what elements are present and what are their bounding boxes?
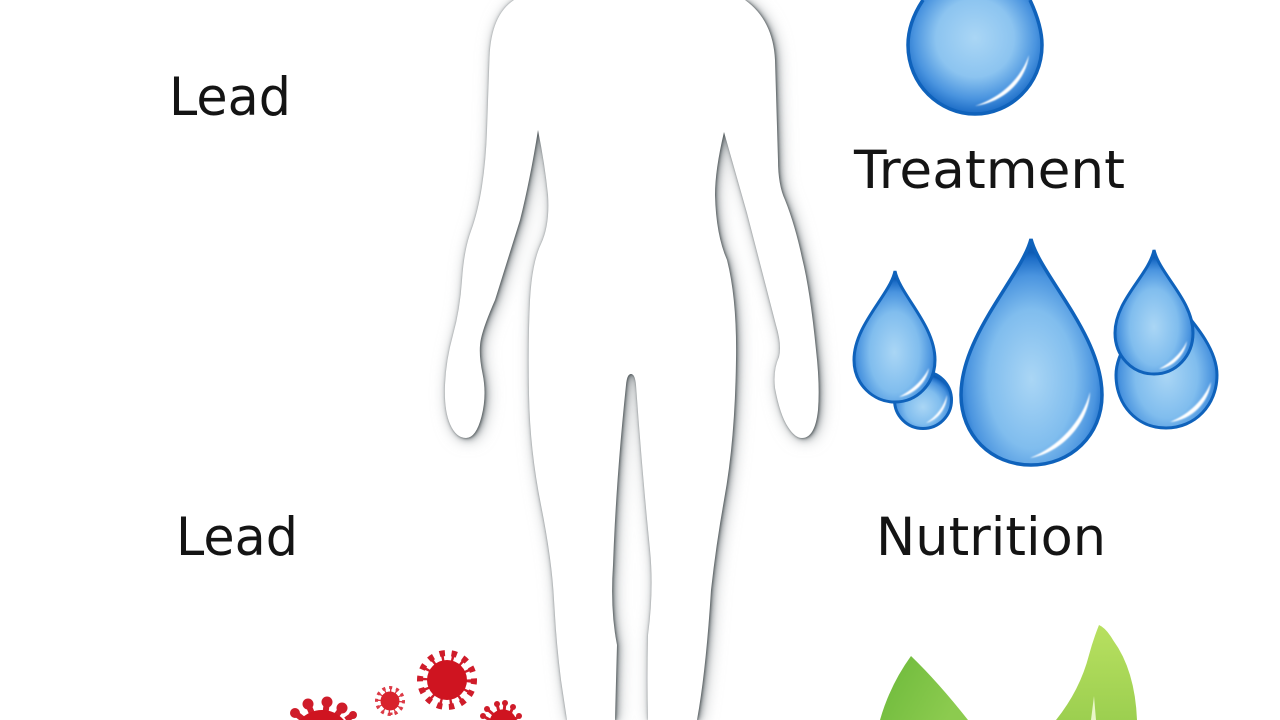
body silhouette: [445, 0, 819, 720]
label: Lead (top): Lead: [169, 67, 291, 128]
icon: virus small: [376, 688, 404, 714]
label: Nutrition: Nutrition: [876, 507, 1106, 568]
icon: virus large: [420, 653, 474, 707]
icon: centre water drop: [961, 239, 1102, 465]
icon: top water drop: [908, 0, 1042, 114]
label: Treatment: Treatment: [853, 140, 1125, 201]
icon: virus bottom right: [480, 700, 522, 720]
icon: left leaf: [880, 656, 968, 720]
icon: right leaf: [1056, 625, 1137, 720]
icon: virus bottom left: [290, 696, 357, 720]
icon: right water drops: [1115, 250, 1217, 428]
icon: left water drops: [854, 271, 952, 428]
label: Lead (bottom): Lead: [176, 507, 298, 568]
